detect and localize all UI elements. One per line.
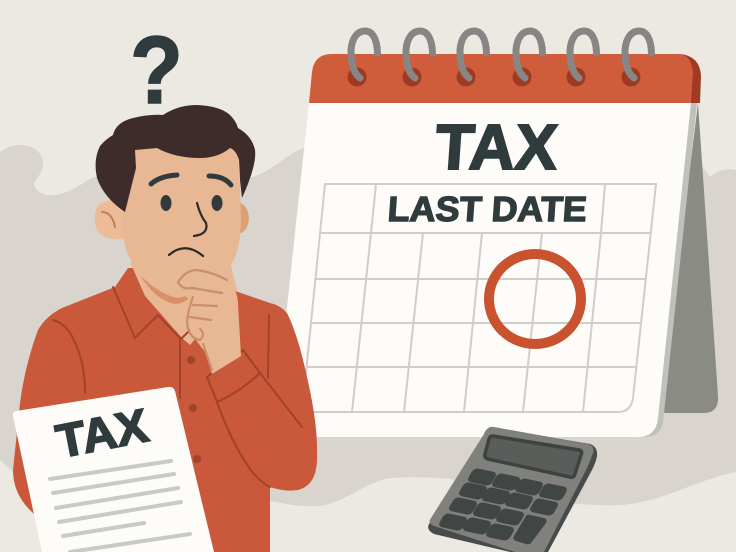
eyes	[160, 195, 222, 211]
calendar grid	[302, 184, 656, 412]
calendar header right edge	[680, 54, 701, 103]
man	[13, 105, 317, 552]
inner ear line	[102, 212, 115, 227]
hand on chin	[178, 270, 241, 374]
binding holes	[348, 68, 640, 86]
hair	[96, 105, 255, 212]
right ear	[238, 202, 249, 234]
spiral rings	[351, 31, 652, 78]
man's shirt	[13, 268, 317, 552]
calculator screen	[485, 436, 582, 477]
calendar page side edge	[630, 103, 697, 437]
face	[122, 145, 241, 291]
nose	[194, 203, 206, 236]
eyebrows	[151, 175, 231, 185]
calendar	[273, 31, 718, 437]
shirt buttons	[187, 356, 201, 463]
mouth	[169, 248, 203, 256]
calculator body	[430, 427, 593, 552]
paper text lines	[50, 461, 190, 552]
left ear	[95, 200, 128, 239]
shirt seams	[53, 287, 302, 487]
calendar red header	[309, 54, 693, 103]
calculator	[428, 427, 597, 552]
finger lines	[178, 270, 227, 370]
calendar back stand	[660, 103, 718, 413]
man's neck and chest	[130, 262, 237, 345]
calendar title: TAX: TAX	[433, 111, 560, 183]
calculator keys	[437, 468, 569, 544]
calculator shadow edge	[428, 427, 597, 552]
calendar page	[273, 103, 691, 437]
calendar subtitle: LAST DATE: LAST DATE	[386, 190, 588, 229]
question mark: ?	[130, 17, 183, 124]
forearm and fist	[178, 270, 241, 374]
neck shadow	[140, 275, 197, 304]
paper sheet	[13, 387, 214, 552]
background blob	[0, 145, 736, 506]
red circle on deadline date	[489, 254, 581, 344]
tax document	[13, 387, 214, 552]
paper title: TAX: TAX	[52, 398, 152, 468]
